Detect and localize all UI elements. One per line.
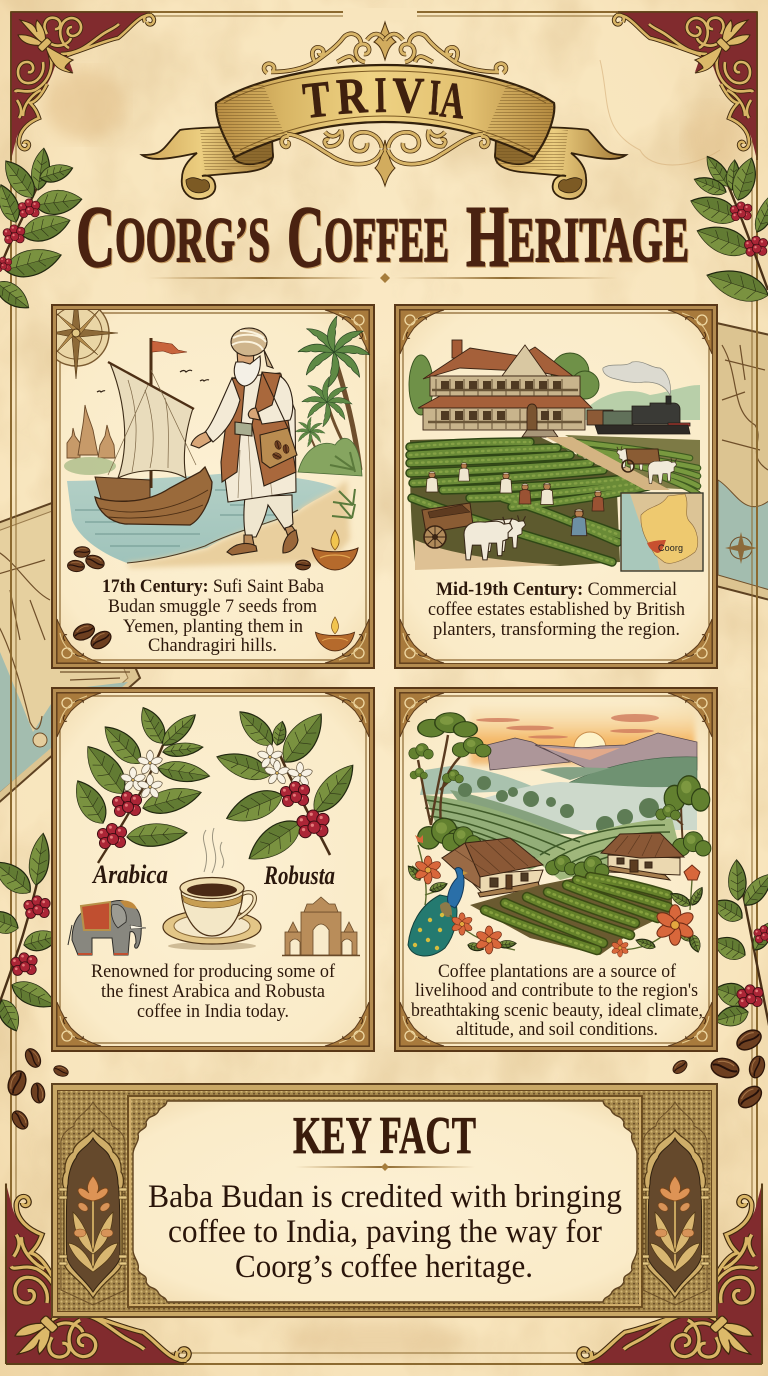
coffee beans group	[67, 546, 311, 652]
inner plaque	[127, 1095, 643, 1308]
banner: TRIVIA ribbon	[142, 22, 626, 199]
coffee branch: top right	[687, 152, 768, 308]
title divider	[148, 273, 618, 283]
caption: Chandragiri hills.	[148, 636, 277, 656]
coffee cup	[163, 878, 261, 950]
corner ornament: top left	[11, 12, 154, 160]
caption: coffee estates established by British	[428, 600, 685, 620]
map: right parchment	[712, 322, 768, 600]
caption: breathtaking scenic beauty, ideal climate,	[411, 1001, 703, 1021]
cottage left	[442, 838, 543, 897]
corner ornament: bottom right	[579, 1183, 762, 1364]
peacock	[408, 868, 468, 956]
banner text: T	[300, 71, 333, 130]
ribbon ornament bottom	[282, 130, 488, 186]
banner text: R	[335, 68, 370, 126]
caption: altitude, and soil conditions.	[456, 1020, 658, 1040]
title: C	[76, 189, 115, 286]
diya lamps	[312, 530, 358, 651]
key fact text	[148, 1179, 622, 1285]
floral right	[611, 865, 705, 957]
caption: Yemen, planting them in	[123, 617, 303, 637]
corner ornament: top right	[614, 12, 757, 160]
title: OFFEE	[324, 204, 449, 275]
elephant	[68, 900, 146, 955]
bag beans	[272, 440, 290, 460]
banner text: I	[374, 68, 387, 124]
Arabica branch	[68, 703, 211, 863]
banner text: I	[427, 70, 442, 127]
bullock carts	[422, 446, 677, 560]
caption: the finest Arabica and Robusta	[101, 982, 325, 1002]
caption	[91, 962, 336, 1022]
coffee branch: lower left	[0, 832, 61, 1034]
trees behind house	[409, 353, 599, 415]
title: OORG’S	[115, 204, 270, 275]
heading: KEY FACT	[293, 1107, 476, 1165]
key fact text: Baba Budan is credited with bringing	[148, 1179, 622, 1215]
panel: mid-19th century	[394, 304, 718, 669]
banner text: A	[438, 72, 468, 130]
mountains	[420, 733, 697, 830]
label: Robusta: Robusta	[263, 861, 335, 890]
caption: Mid-19th Century: Commercial	[436, 580, 677, 600]
forested ridge	[450, 776, 659, 835]
coffee branch: top left	[0, 147, 83, 315]
bushes by cottages	[546, 855, 609, 878]
inset map: Coorg: Coorg	[658, 543, 683, 553]
coffee branch: lower right	[710, 860, 768, 1030]
side niche left	[59, 1102, 127, 1305]
main ribbon	[216, 65, 554, 157]
panel: Arabica and Robusta	[51, 687, 375, 1052]
caption: 17th Century: Sufi Saint Baba	[102, 577, 324, 597]
label: Arabica: Arabica	[91, 860, 168, 889]
banner text: V	[392, 68, 425, 125]
steam	[203, 828, 224, 873]
key fact text: Coorg’s coffee heritage.	[235, 1249, 533, 1285]
side niche right	[641, 1102, 709, 1305]
workers	[426, 463, 604, 536]
map: left parchment	[0, 500, 140, 806]
caption: planters, transforming the region.	[433, 620, 680, 640]
inset map: Coorg	[621, 493, 703, 571]
panel: key fact	[51, 1083, 718, 1318]
plantation rows	[470, 875, 672, 955]
plantation house	[418, 340, 592, 437]
caption: coffee in India today.	[137, 1002, 289, 1022]
caption	[411, 962, 703, 1040]
ribbon tails	[142, 127, 626, 199]
caption	[428, 580, 685, 640]
sea and shore	[67, 472, 350, 568]
temple	[67, 405, 115, 458]
corner ornament: bottom left	[6, 1183, 189, 1364]
train	[587, 396, 690, 434]
caption: Coffee plantations are a source of	[438, 962, 677, 982]
sun	[574, 732, 606, 764]
panel: 17th century	[43, 291, 375, 669]
caption	[102, 577, 324, 656]
key fact text: coffee to India, paving the way for	[168, 1214, 602, 1250]
fields	[410, 435, 700, 570]
title	[76, 189, 689, 286]
trees	[409, 713, 711, 856]
palm trees	[295, 316, 370, 518]
gateway	[282, 897, 360, 956]
panel: plantations today	[394, 687, 718, 1052]
title: C	[287, 189, 324, 286]
Baba Budan figure	[191, 328, 298, 555]
smoke	[603, 362, 671, 395]
heading divider	[295, 1163, 475, 1171]
distant bushes	[64, 457, 116, 475]
banner text	[300, 68, 468, 130]
caption: Budan smuggle 7 seeds from	[108, 597, 318, 617]
caption: livelihood and contribute to the region's	[415, 981, 698, 1001]
title: H	[466, 189, 509, 286]
sailboat	[95, 338, 212, 525]
hills	[585, 385, 700, 420]
compass rose	[57, 310, 118, 379]
floral left	[405, 835, 448, 905]
sunset sky	[470, 705, 695, 765]
terraces	[425, 795, 680, 880]
Robusta branch	[213, 705, 362, 870]
floral bottom left	[450, 913, 516, 954]
coffee beans: left scatter	[5, 1046, 70, 1132]
ribbon ornament top	[264, 22, 506, 73]
cottage right	[601, 833, 684, 880]
coffee beans: right scatter	[670, 1026, 767, 1112]
caption: Renowned for producing some of	[91, 962, 336, 982]
birds	[97, 370, 209, 392]
